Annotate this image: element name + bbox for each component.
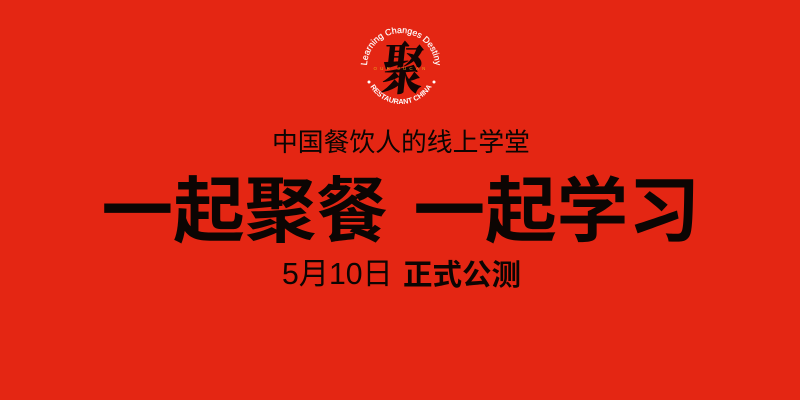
subtitle: 中国餐饮人的线上学堂 [272, 129, 530, 157]
logo top arc text: Learning Changes Destiny [360, 27, 440, 66]
logo glyph: 聚 [378, 26, 429, 106]
logo small caption: OUR JUCAN [373, 66, 429, 71]
logo star left [368, 80, 370, 84]
date line [282, 258, 521, 292]
date line: 5月10日 [282, 258, 393, 291]
date line: 正式公测 [403, 259, 521, 292]
main title: 一起聚餐 一起学习 [102, 172, 700, 252]
logo star right [432, 80, 436, 84]
logo [360, 26, 440, 106]
logo bottom arc text: RESTAURANT CHINA [370, 84, 432, 104]
